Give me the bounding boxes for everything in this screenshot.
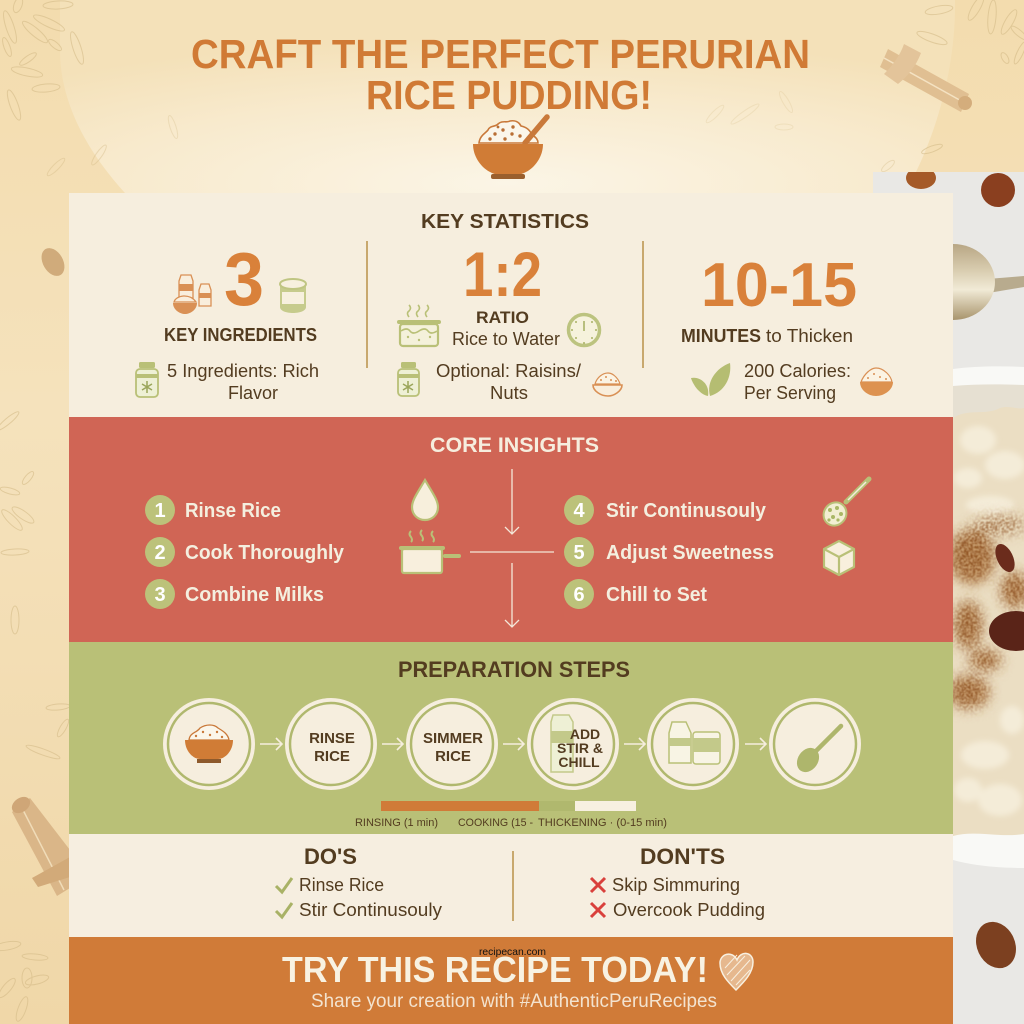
divider bbox=[366, 241, 368, 368]
insight list left: 2 bbox=[154, 542, 166, 564]
step circle 4: add stir and chill: STIR & bbox=[557, 740, 603, 756]
stat: 10-15 minutes: Per Serving bbox=[744, 383, 836, 403]
raisin top right bbox=[981, 173, 1015, 207]
icon: pot with steam bbox=[399, 530, 461, 573]
step circle 4: add stir and chill bbox=[527, 698, 619, 790]
arrows and connector bbox=[470, 469, 554, 627]
timeline bar bbox=[381, 801, 636, 811]
step circle 3: simmer rice: SIMMER bbox=[423, 730, 483, 747]
icon: steaming pot bbox=[397, 305, 441, 346]
don'ts list bbox=[591, 844, 765, 920]
stat: 3 key ingredients: Flavor bbox=[228, 383, 278, 403]
hashtag line: Share your creation with #AuthenticPeruRecipes bbox=[311, 991, 717, 1012]
icon: small bowl bbox=[593, 373, 622, 396]
heading: core insights: CORE INSIGHTS bbox=[430, 434, 599, 457]
timeline labels: COOKING (15 - bbox=[458, 817, 533, 829]
insight list right: Adjust Sweetness bbox=[606, 542, 774, 564]
stat: 1:2 ratio bbox=[436, 240, 581, 403]
title: CRAFT THE PERFECT PERURIAN bbox=[191, 31, 810, 77]
icon: bowl bbox=[860, 368, 893, 396]
step circle 3: simmer rice bbox=[406, 698, 498, 790]
raisin watermark bbox=[37, 244, 69, 280]
stat: 10-15 minutes bbox=[681, 251, 857, 403]
raisin top left bbox=[906, 172, 936, 189]
don'ts list: Overcook Pudding bbox=[613, 900, 765, 920]
insight list left bbox=[145, 495, 345, 609]
stat: 1:2 ratio: Optional: Raisins/ bbox=[436, 361, 581, 381]
timeline labels: RINSING (1 min) bbox=[355, 817, 438, 829]
panel: key statistics bbox=[69, 193, 953, 417]
insight list right: 6 bbox=[573, 584, 585, 606]
cinnamon stick top right bbox=[880, 44, 972, 112]
stat: 10-15 minutes: 10-15 bbox=[701, 251, 857, 320]
spoon bbox=[953, 244, 1024, 320]
icon: leaves bbox=[691, 363, 730, 396]
step circle 2: rinse rice: RINSE bbox=[309, 730, 355, 747]
step circle 6: spoon bbox=[769, 698, 861, 790]
watermark: recipecan.com bbox=[479, 947, 546, 958]
stat: 3 key ingredients: 3 bbox=[224, 237, 264, 321]
insight list left: Cook Thoroughly bbox=[185, 542, 345, 564]
bowl rim bbox=[953, 366, 1024, 868]
don'ts list: DON'TS bbox=[640, 844, 725, 869]
pudding highlights bbox=[954, 426, 1024, 816]
stat: 10-15 minutes: 200 Calories: bbox=[744, 361, 851, 381]
call to action heading: TRY THIS RECIPE TODAY! bbox=[282, 949, 708, 990]
icon: bowl of rice with spoon bbox=[473, 117, 547, 179]
icon: stirring spoon bbox=[819, 479, 869, 530]
title: RICE PUDDING! bbox=[366, 72, 652, 118]
insight list right: Stir Continusouly bbox=[606, 500, 767, 522]
stat: 3 key ingredients: 5 Ingredients: Rich bbox=[167, 361, 319, 381]
insight list left: 3 bbox=[154, 584, 166, 606]
panel: call to action bbox=[69, 937, 953, 1024]
icon: spice jar bbox=[136, 362, 158, 397]
raisin bottom bbox=[976, 922, 1016, 968]
don'ts list: Skip Simmuring bbox=[612, 875, 740, 895]
cinnamon dusting bbox=[948, 517, 1024, 708]
do's list: Stir Continusouly bbox=[299, 900, 442, 920]
step circle 1: bowl bbox=[163, 698, 255, 790]
cinnamon underlay bbox=[948, 532, 1024, 706]
timeline labels bbox=[355, 817, 667, 829]
panel: do's and don'ts bbox=[69, 834, 953, 937]
heading: preparation steps: PREPARATION STEPS bbox=[398, 657, 630, 682]
photo of rice pudding bowl bbox=[873, 167, 1024, 1024]
step circle 3: simmer rice: RICE bbox=[435, 748, 471, 765]
step circle 2: rinse rice: RICE bbox=[314, 748, 350, 765]
do's list: DO'S bbox=[304, 844, 357, 869]
stat: 3 key ingredients bbox=[164, 237, 319, 403]
step circle 5: milk and can bbox=[647, 698, 739, 790]
insight list left: Combine Milks bbox=[185, 584, 324, 606]
icon: can bbox=[280, 279, 306, 313]
stat: 10-15 minutes: to Thicken bbox=[766, 326, 853, 346]
stat: 1:2 ratio: RATIO bbox=[476, 308, 529, 327]
icon: milk cartons and rice bowl bbox=[173, 275, 211, 314]
icon: sugar cube bbox=[824, 541, 854, 575]
insight list right bbox=[564, 495, 774, 609]
insight list right: 5 bbox=[573, 542, 585, 564]
raisins in pudding bbox=[989, 541, 1024, 651]
insight list right: Chill to Set bbox=[606, 584, 707, 606]
panel: core insights bbox=[69, 417, 953, 642]
icon: clock bbox=[568, 314, 600, 346]
step circle 2: rinse rice bbox=[285, 698, 377, 790]
stat: 10-15 minutes: MINUTES bbox=[681, 326, 761, 346]
stat: 3 key ingredients: KEY INGREDIENTS bbox=[164, 325, 317, 345]
panel: preparation steps bbox=[69, 642, 953, 834]
step circle 4: add stir and chill: ADD bbox=[570, 726, 600, 742]
title bbox=[191, 31, 810, 118]
stat: 1:2 ratio: Rice to Water bbox=[452, 329, 560, 349]
insight list left: Rinse Rice bbox=[185, 500, 281, 522]
insight list right: 4 bbox=[573, 500, 585, 522]
step arrows bbox=[260, 738, 766, 750]
do's list bbox=[276, 844, 442, 920]
heading: key statistics: KEY STATISTICS bbox=[421, 211, 589, 233]
pudding bbox=[953, 407, 1024, 836]
step circle 4: add stir and chill: CHILL bbox=[558, 754, 600, 770]
timeline labels: THICKENING · (0-15 min) bbox=[538, 817, 667, 829]
stat: 1:2 ratio: 1:2 bbox=[463, 240, 542, 310]
insight list left: 1 bbox=[154, 500, 166, 522]
cinnamon stick bottom left bbox=[9, 794, 70, 896]
stat: 1:2 ratio: Nuts bbox=[490, 383, 528, 403]
icon: water drop bbox=[412, 480, 438, 520]
icon: spice jar bbox=[398, 362, 419, 396]
icon: heart bbox=[720, 953, 753, 990]
do's list: Rinse Rice bbox=[299, 875, 384, 895]
